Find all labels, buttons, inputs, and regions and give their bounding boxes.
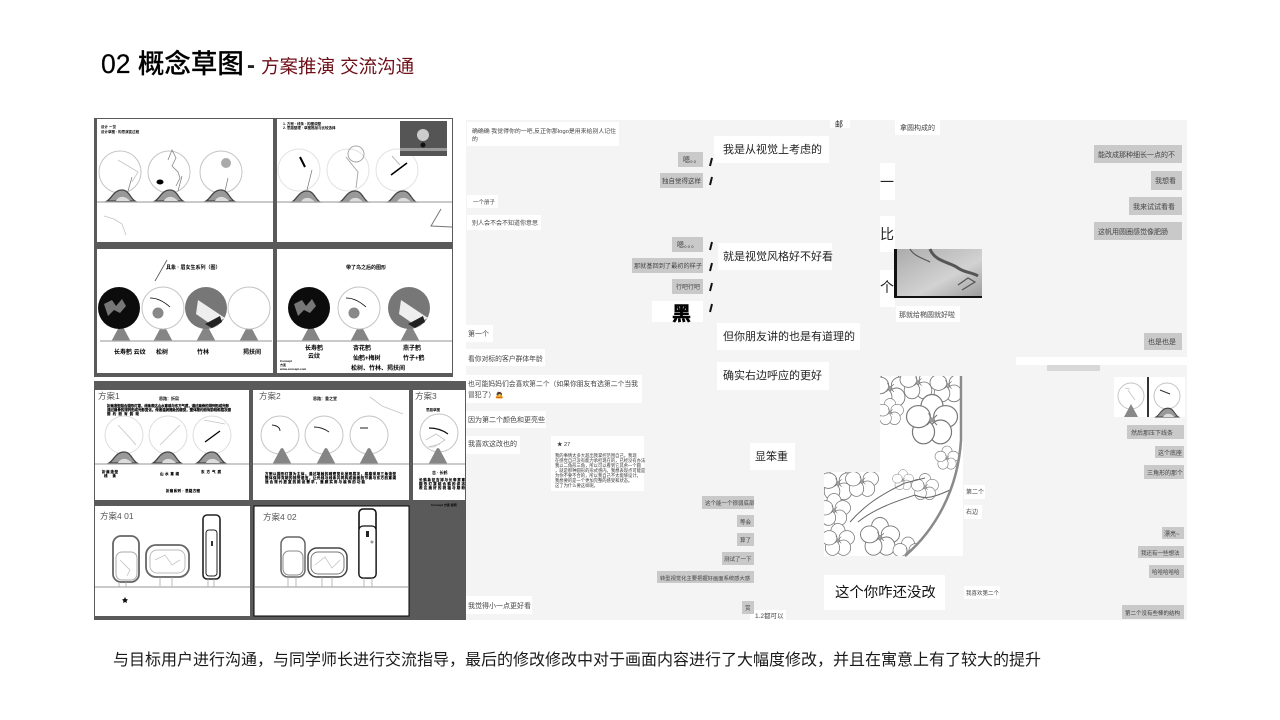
sketch slide: three filled circles with labels: 燕子鹤 [403, 344, 421, 352]
scheme 1: 东方气质 [201, 469, 222, 474]
chat bubbles: gray messages: 行吧行吧 [676, 283, 700, 291]
scheme 3: 圆形灯罩结合鹤的姿态 [419, 481, 466, 486]
scheme 4 02: 方案4 02 [263, 512, 297, 522]
chat bubbles: gray messages: 独自觉得这样 [662, 176, 702, 185]
cropped white message fragments: 第二个 [966, 488, 984, 496]
document card message: 我的事情太多大超出我掌控范围自己。我现 [555, 452, 637, 459]
large messages: 但你朋友讲的也是有道理的 [723, 329, 855, 343]
sketch slide: four filled circles: 松树 [156, 348, 168, 356]
document card message: 我想要的是一个更加完整的感受和状态。 [555, 477, 632, 484]
sketch slide: three filled circles with labels: 长寿鹤 [305, 344, 323, 352]
scheme 4 02 [254, 506, 409, 616]
sketch slide: four filled circles [97, 249, 273, 373]
image message: blossom line drawing [824, 376, 963, 557]
chat bubbles: gray messages: 漂亮~ [1164, 530, 1180, 538]
sketch slide: four filled circles: 竹林 [197, 348, 209, 356]
sketch slide: three filled circles with labels: 仙鹤+梅树 [353, 354, 381, 362]
sticker message [652, 301, 703, 325]
document card message: 为你不要不合的，所以我自己不太能够设计。 [555, 472, 641, 479]
panel: sketch grid two [94, 381, 466, 620]
sketch slide: four filled circles: 长寿鹤 云纹 [114, 348, 146, 356]
title: 方案推演 交流沟通 [261, 56, 414, 77]
scheme 1: 山水意境 [160, 471, 180, 476]
cropped white message fragments: 一 [880, 174, 894, 190]
chat bubbles: gray messages: 我想看 [1155, 176, 1176, 185]
chat bubbles: gray messages: 这个底座 [1158, 449, 1182, 457]
chat bubbles: left white messages: 看你对标的客户群体年龄 [468, 354, 543, 363]
scheme 1: 线条 [104, 473, 116, 478]
sketch slide: three circles on mountains: 设计草图 · 构思演变过程 [101, 129, 140, 134]
chat bubbles: left white messages: 别人会不会不知道你意思 [472, 219, 538, 227]
sketch slide: three filled circles with labels [277, 249, 452, 373]
chat bubbles: gray messages: 转型视觉化主要把握好画面系统感大感 [660, 574, 751, 582]
scheme 2: 思路：重之堂 [313, 395, 337, 401]
scheme 1: 通过扇骨的排列形成光影变化，传递温润雅致的感受，整体简约而有韵味和层次感 [107, 407, 232, 412]
large messages: 这个你咋还没改 [835, 584, 936, 601]
document card message: 在感觉自己没有能力承担现在的，已经没有办法 [555, 457, 646, 464]
chat bubbles: gray messages: 我来试试看看 [1133, 202, 1175, 211]
chat bubbles: gray messages: 等会 [740, 518, 752, 526]
document card message: ，就是那种圆形的形式感内。我想表现点可能是 [555, 467, 646, 474]
large messages: 我是从视觉上考虑的 [723, 142, 822, 156]
document card message: ★ 27 [557, 442, 570, 448]
document card message [551, 436, 646, 491]
scheme 4 01: 方案4 01 [100, 511, 134, 521]
chat bubbles: left white messages: 我觉得小一点更好看 [468, 601, 531, 610]
scheme 4 01 [95, 506, 250, 616]
cropped white message fragments: 邮 [835, 119, 843, 129]
document card message: 我以二角形三角，所以可以看到它其余一个圆 [555, 462, 641, 469]
title [101, 49, 414, 79]
chat bubbles: gray messages: 这帆用圆圈感觉像肥肠 [1098, 227, 1168, 236]
sketch slide: three filled circles with labels: 带了鸟之后的图形 [346, 264, 386, 271]
sketch slide: three filled circles with labels: www.concept.com [279, 367, 307, 371]
chat bubbles: gray messages: 这个能一个很弱底部 [705, 499, 755, 507]
chat bubbles: gray messages: 能改成那种细长一点的不 [1098, 150, 1175, 159]
panel: sketch grid one [94, 118, 453, 377]
chat bubbles: left white messages: 确确确 我觉得你的一吧,反正你那logo是用来给别人记住 [472, 127, 616, 135]
inset lamp photo [400, 121, 447, 156]
sketch slide: three filled circles with labels: 杏花鹤 [353, 344, 371, 352]
scheme 1: 折扇造型 [102, 469, 118, 474]
scheme 2: 整体保持克制的视觉语言，让光线与线条共同构成画面的节奏与东方的意境 [265, 475, 396, 480]
chat bubbles: gray messages: 第二个没有些棒的结构 [1125, 609, 1181, 617]
chat bubbles: gray messages: 然后那压下线条 [1131, 429, 1173, 437]
scheme 2: 方案以圆形灯罩为主体，通过笔触的疏密变化呈现层次，底座采用三角造型 [265, 471, 396, 476]
chat marks: small black strokes [710, 158, 712, 312]
chat bubbles: gray messages: 测试了一下 [724, 555, 752, 563]
sketch slide: three filled circles with labels: 方案 [280, 362, 286, 367]
panel: sketch grid two: Concept 方案 说明 [431, 502, 457, 507]
chat bubbles: gray messages: 赏 [745, 604, 751, 612]
scheme 3: 方案3 [415, 391, 437, 401]
sketch slide: three circles on mountains: 设计 一览 [101, 124, 116, 129]
chat bubbles: left white messages: 一个册子 [473, 199, 496, 206]
large messages: 显笨重 [755, 449, 788, 463]
chat bubbles: gray messages: 我还有一些想法 [1141, 549, 1180, 557]
sketch slide: three filled circles with labels: 云纹 [308, 352, 320, 360]
scheme 1: 折扇造型结合圆形灯罩，线条表达山水意境与东方气质，通过扇骨的排列形成光影 [107, 403, 230, 408]
sketch slide: black strokes and inset photo: 2. 思路整理 · 草图推敲与比较选择 [283, 125, 336, 130]
large messages: 就是视觉风格好不好看 [723, 249, 833, 263]
chat bubbles: left white messages: 1.2都可以 [755, 612, 784, 620]
chat bubbles: left white messages: 我喜欢这改也的 [468, 439, 517, 448]
caption: 与目标用户进行沟通，与同学师长进行交流指导，最后的修改修改中对于画面内容进行了大幅度修改，并且在寓意上有了较大的提升 [113, 650, 1041, 669]
scheme 3: 长鹤象征吉祥与长寿寓意 [419, 477, 466, 482]
scheme 3: 吉 · 长鹤 [432, 469, 448, 475]
cropped white message fragments: 拿圆构成的 [900, 123, 935, 132]
cropped white message fragments: 个 [880, 279, 894, 295]
sticker message: 黑 [672, 304, 691, 325]
sketch slide: three filled circles with labels: 松树、竹林、揭扶间 [351, 364, 405, 372]
chat bubbles: gray messages: 嗯。。。 [677, 241, 698, 249]
chat bubbles: left white messages: 冒犯了）🙇 [468, 390, 504, 399]
image message: two sketch thumbnails [1114, 377, 1185, 417]
sketch slide: black strokes and inset photo: 1. 方案 · 线条 · 构图调整 [283, 121, 322, 126]
large messages [714, 136, 945, 610]
sketch slide: three filled circles with labels: Concept [280, 359, 292, 363]
cropped white message fragments: 我喜欢第二个 [966, 589, 1000, 597]
sketch slide: four filled circles: 具象 · 眉女生系列（图） [166, 264, 220, 271]
title: - [247, 52, 255, 79]
sketch slide: black strokes and inset photo [277, 119, 452, 242]
scheme 2: 方案2 [259, 391, 281, 401]
cropped white message fragments [830, 119, 1000, 599]
scheme 1 [95, 390, 249, 500]
scheme 1: 折扇系列 · 思路方案 [166, 488, 200, 493]
chat bubbles: left white messages: 第一个 [468, 329, 489, 338]
chat bubbles: gray messages: 算了 [740, 536, 751, 544]
image message: sketch photo [894, 249, 982, 298]
scheme 2: 适合现代居室的陈设需求，兼顾实用与装饰的功能 [265, 479, 366, 484]
chat bubbles: gray messages: 三角形的那个 [1147, 469, 1183, 477]
chat bubbles: left white messages: 也可能妈妈们会喜欢第二个（如果你朋友有选第二个当我 [468, 379, 638, 388]
scheme 1: 简约而有韵味 [107, 411, 140, 416]
scheme 3: 表达美好的祝福与期盼 [419, 485, 466, 490]
chat bubbles: left white messages: 的 [472, 135, 478, 143]
sketch slide: three filled circles with labels: 竹子+鹤 [403, 354, 425, 362]
sketch slide: three circles on mountains [97, 119, 273, 242]
cropped white message fragments: 比 [880, 226, 894, 242]
panel: chat screenshot background [466, 120, 1187, 620]
sketch slide: four filled circles: 揭扶间 [243, 348, 261, 356]
chat bubbles: gray messages: 哈哈哈哈哈 [1152, 568, 1180, 576]
scheme 3: 思路草图 [426, 407, 440, 412]
chat bubbles: gray messages: 嗯。。 [683, 156, 700, 164]
document card message: 这了为什么要这样呢。 [555, 482, 598, 489]
chat bubbles: gray messages: 也是也是 [1148, 337, 1176, 346]
chat bubbles: gray messages: 那就基回到了最初的样子 [634, 262, 702, 270]
scheme 2 [253, 390, 409, 500]
chat bubbles: gray messages [632, 145, 1184, 619]
large messages: 确实右边呼应的更好 [723, 368, 822, 382]
scheme 3 [413, 390, 466, 500]
title: 02 概念草图 [101, 49, 244, 79]
chat bubbles: left white messages [466, 122, 786, 620]
scheme 1: 方案1 [98, 391, 120, 401]
cropped white message fragments: 那就给椭圆就好啦 [899, 310, 955, 319]
cropped white message fragments: 右边 [966, 508, 978, 516]
chat bubbles: left white messages: 因为第二个颜色和更亮些 [468, 415, 545, 424]
scheme 1: 思路：折扇 [159, 395, 179, 401]
